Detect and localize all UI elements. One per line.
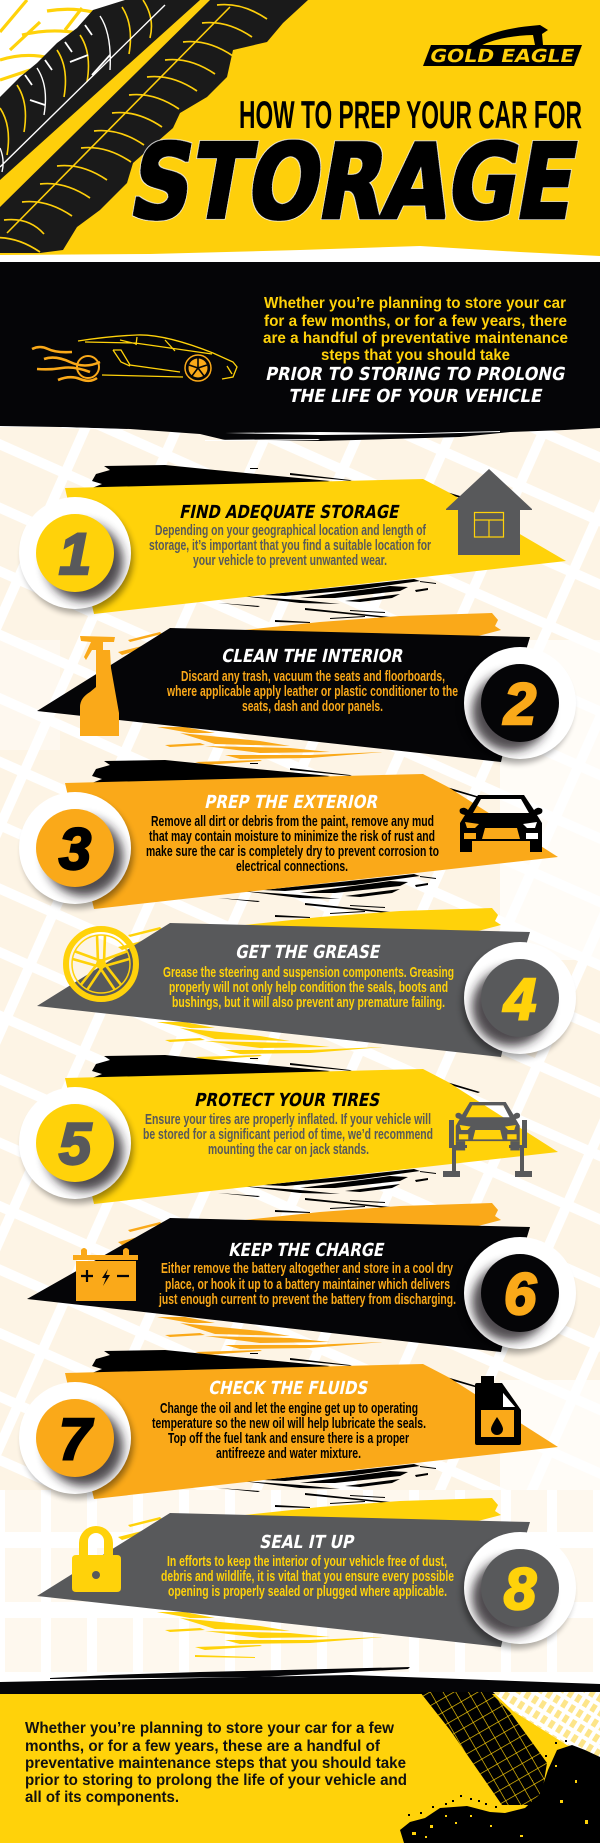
body text (161, 1553, 454, 1600)
body text: storage, it’s important that you find a suitable location for (149, 537, 431, 554)
footer text: preventative maintenance steps that you should take (25, 1755, 406, 1772)
number badge 7: 7 (59, 1407, 94, 1472)
logo: Gold Eagle: GOLD EAGLE (428, 46, 576, 67)
white brush edge under header (0, 246, 600, 263)
panel: step 8 seal it up (37, 1498, 576, 1658)
body text: Top off the fuel tank and ensure there is a proper (168, 1430, 409, 1447)
body text: Either remove the battery altogether and store in a cool dry (161, 1260, 453, 1277)
footer text (25, 1720, 407, 1806)
intro text: THE LIFE OF YOUR VEHICLE (287, 386, 544, 407)
panel: step 7 check the fluids (19, 1350, 558, 1508)
body text: mounting the car on jack stands. (208, 1141, 369, 1158)
white tire track (493, 1692, 600, 1757)
body text: bushings, but it will also prevent any premature failing. (172, 994, 445, 1011)
body text: antifreeze and water mixture. (216, 1445, 361, 1462)
footer panel (0, 1667, 600, 1843)
icon: alloy wheel (66, 929, 136, 999)
number badge 2 (461, 647, 576, 764)
heading: PREP THE EXTERIOR (203, 792, 380, 813)
body text: Ensure your tires are properly inflated. If your vehicle will (145, 1111, 431, 1128)
heading: GET THE GREASE (234, 942, 382, 963)
body text: seats, dash and door panels. (242, 698, 383, 715)
intro text: for a few months, or for a few years, there (264, 313, 567, 330)
body text (143, 1111, 433, 1158)
panel: step 5 protect your tires (19, 1055, 558, 1213)
number badge 2: 2 (503, 672, 536, 737)
body text: properly will not only help condition the seals, boots and (169, 979, 448, 996)
body text: debris and wildlife, it is vital that you ensure every possible (161, 1568, 454, 1585)
logo: Gold Eagle (423, 25, 582, 67)
black grunge splatter (400, 1740, 600, 1843)
body text: temperature so the new oil will help lubricate the seals. (152, 1415, 426, 1432)
body text: that may contain moisture to minimize the risk of rust and (149, 828, 435, 845)
body text: place, or hook it up to a battery maintainer which delivers (165, 1276, 450, 1293)
panel: step 4 get the grease (37, 908, 576, 1068)
body text (166, 668, 458, 715)
number badge 4 (461, 942, 576, 1059)
number badge 1 (19, 497, 134, 614)
number badge 1: 1 (59, 522, 91, 587)
background: cream road map texture (0, 427, 600, 1682)
heading: SEAL IT UP (258, 1532, 356, 1553)
intro panel: black band (0, 262, 600, 441)
footer text: months, or for a few years, these are a handful of (25, 1738, 381, 1755)
heading: CHECK THE FLUIDS (207, 1378, 370, 1399)
icon: car battery (73, 1248, 138, 1301)
number badge 3: 3 (59, 817, 91, 882)
body text (146, 813, 439, 875)
icon: spray bottle (80, 636, 119, 736)
body text: Change the oil and let the engine get up to operating (160, 1400, 418, 1417)
footer text: Whether you’re planning to store your car for a few (25, 1720, 395, 1737)
body text (152, 1400, 426, 1462)
intro text: PRIOR TO STORING TO PROLONG (264, 364, 567, 385)
panel: step 3 prep the exterior (19, 760, 558, 918)
body text (149, 522, 431, 569)
number badge 3 (19, 792, 134, 909)
tire track: lower band (0, 0, 308, 253)
panel: step 1 find adequate storage (19, 465, 566, 623)
icon: oil jug (475, 1376, 521, 1445)
header: yellow title area (0, 0, 600, 263)
body text: In efforts to keep the interior of your vehicle free of dust, (167, 1553, 447, 1570)
panel: step 2 clean the interior (37, 613, 576, 773)
body text: Discard any trash, vacuum the seats and floorboards, (181, 668, 445, 685)
icon: car front (460, 795, 542, 852)
body text: just enough current to prevent the battery from discharging. (158, 1291, 456, 1308)
intro text: steps that you should take (321, 347, 510, 364)
number badge 6 (461, 1237, 576, 1354)
icon: car on jack stands (443, 1102, 532, 1177)
number badge 6: 6 (504, 1262, 537, 1327)
tire track: upper band (0, 0, 200, 180)
intro text (263, 295, 568, 407)
panel: step 6 keep the charge (27, 1203, 576, 1363)
number badge 5: 5 (59, 1112, 92, 1177)
number badge 7 (19, 1382, 134, 1499)
heading: FIND ADEQUATE STORAGE (178, 502, 401, 523)
intro text: Whether you’re planning to store your car (264, 295, 566, 312)
body text (163, 964, 454, 1011)
icon: flaming sports car (32, 335, 237, 381)
body text: be stored for a significant period of time, we’d recommend (143, 1126, 433, 1143)
heading: PROTECT YOUR TIRES (193, 1090, 382, 1111)
body text: Grease the steering and suspension components. Greasing (163, 964, 454, 981)
body text: your vehicle to prevent unwanted wear. (193, 552, 387, 569)
number badge 5 (19, 1087, 134, 1204)
body text: where applicable apply leather or plastic conditioner to the (166, 683, 458, 700)
body text: make sure the car is completely dry to prevent corrosion to (146, 843, 439, 860)
heading: CLEAN THE INTERIOR (220, 646, 405, 667)
body text: Remove all dirt or debris from the paint, remove any mud (151, 813, 434, 830)
black tire track (420, 1692, 547, 1805)
body text (158, 1260, 456, 1308)
footer text: all of its components. (25, 1789, 179, 1806)
icon: padlock (72, 1526, 121, 1592)
intro text: are a handful of preventative maintenance (263, 330, 568, 347)
icon: house (446, 469, 532, 555)
body text: electrical connections. (236, 858, 348, 875)
number badge 8: 8 (504, 1557, 537, 1622)
heading: KEEP THE CHARGE (227, 1240, 386, 1261)
footer text: prior to storing to prolong the life of your vehicle and (25, 1772, 407, 1789)
body text: Depending on your geographical location and length of (155, 522, 427, 539)
body text: opening is properly sealed or plugged where applicable. (168, 1583, 447, 1600)
number badge 4: 4 (503, 967, 536, 1032)
number badge 8 (461, 1532, 576, 1649)
